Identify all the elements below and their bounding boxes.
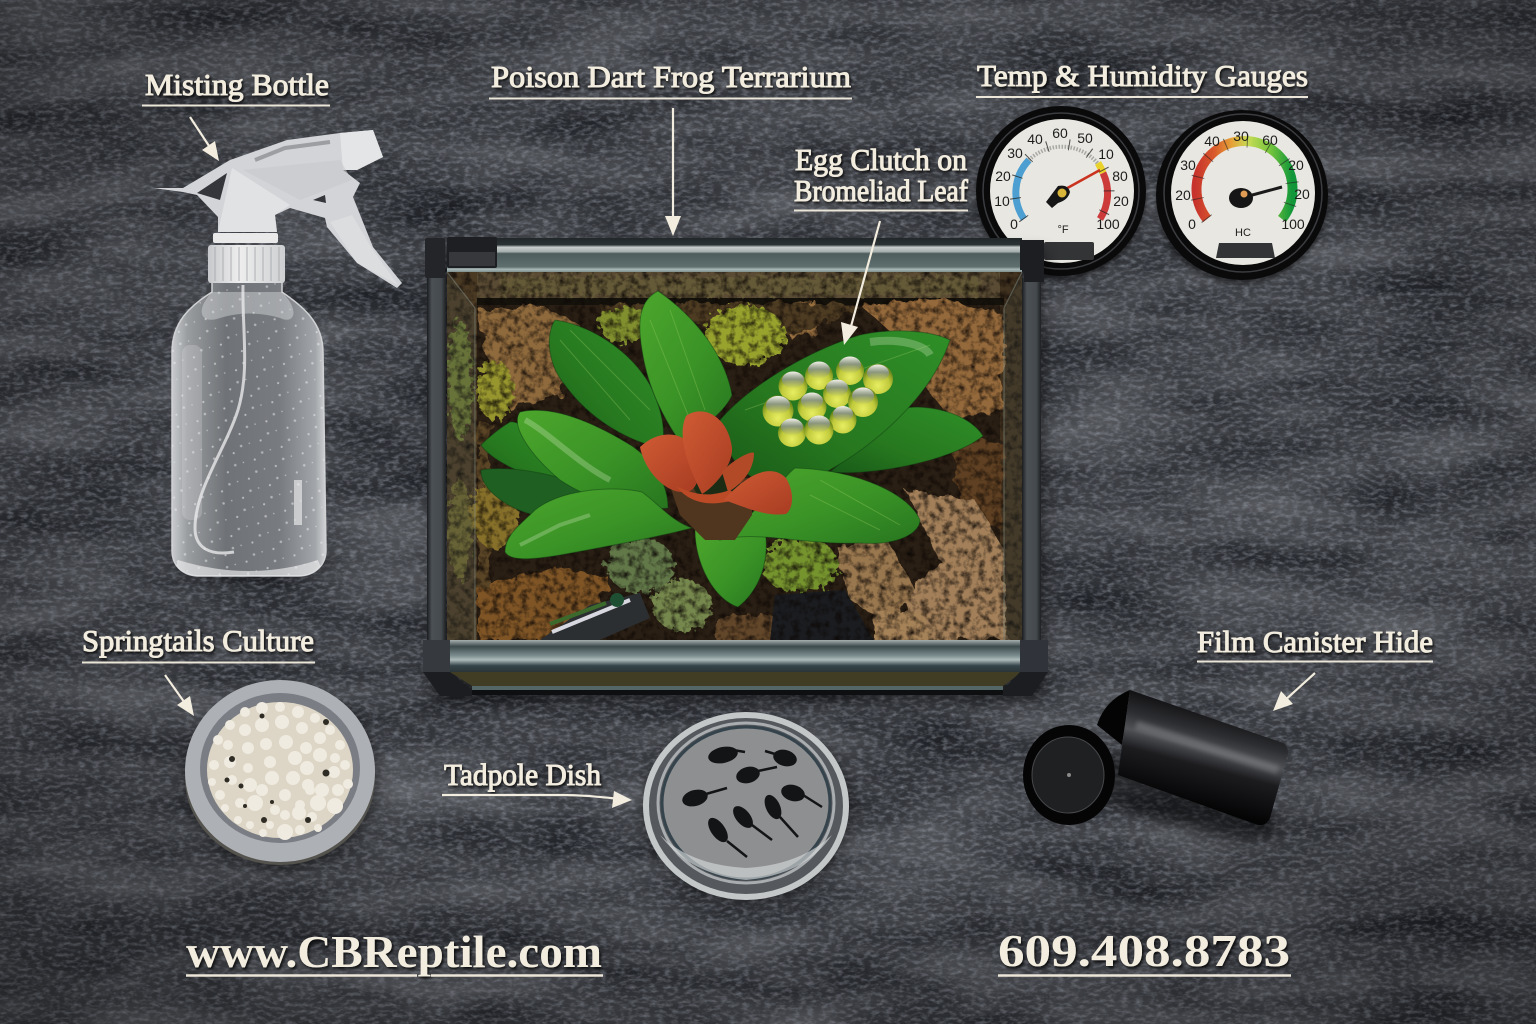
gauge: humidity: 20	[1288, 157, 1304, 173]
gauge: humidity	[1156, 110, 1328, 284]
arrow: to springtails culture	[165, 675, 194, 716]
gauge: temperature: 30	[1007, 145, 1023, 161]
tadpoles	[680, 744, 822, 857]
gauge: temperature: 20	[1113, 193, 1129, 209]
title label: Misting Bottle: Misting Bottle	[145, 67, 329, 102]
gauge: temperature: 20	[995, 168, 1011, 184]
arrow: to egg clutch	[841, 221, 880, 345]
label: Egg Clutch on Bromeliad Leaf: Bromeliad Leaf	[794, 173, 969, 208]
label: Tadpole Dish with arrow: Tadpole Dish	[444, 757, 601, 792]
terrarium glass walls and frame	[423, 237, 1048, 696]
title label: Poison Dart Frog Terrarium: Poison Dart Frog Terrarium	[491, 59, 851, 94]
gauge: temperature: °F	[1057, 224, 1069, 236]
gauge: temperature: 80	[1112, 168, 1128, 184]
gauge: temperature: 100	[1096, 216, 1120, 232]
tadpole dish	[644, 715, 852, 902]
gauge: temperature: 10	[994, 193, 1010, 209]
gauge: humidity: 30	[1180, 157, 1196, 173]
gauge: humidity: 40	[1204, 133, 1220, 149]
gauge: humidity: HC	[1235, 227, 1251, 239]
label: Film Canister Hide: Film Canister Hide	[1197, 624, 1433, 659]
bromeliad plant	[481, 291, 983, 607]
label: Egg Clutch on Bromeliad Leaf: Egg Clutch on	[795, 142, 967, 177]
label: Springtails Culture: Springtails Culture	[82, 623, 314, 658]
title label: Temp and Humidity Gauges: Temp & Humidity Gauges	[977, 58, 1308, 93]
gauge: temperature: 0	[1010, 216, 1018, 232]
arrow: to terrarium	[665, 108, 681, 236]
springtails culture dish	[185, 680, 378, 868]
arrow: to film canister	[1273, 673, 1315, 711]
gauge: temperature: 10	[1098, 146, 1114, 162]
film canister hide	[1023, 690, 1288, 857]
gauge: humidity: 20	[1294, 186, 1310, 202]
gauge: temperature	[976, 106, 1146, 280]
egg clutch	[762, 356, 893, 447]
arrow: to misting bottle	[190, 117, 219, 161]
gauge: humidity: 60	[1262, 132, 1278, 148]
gauge: humidity: 30	[1233, 128, 1249, 144]
terrarium	[423, 237, 1048, 700]
gauge: temperature: 50	[1077, 130, 1093, 146]
gauge: humidity: 100	[1281, 216, 1305, 232]
terrarium substrate	[447, 272, 1022, 642]
gauge: temperature: 40	[1027, 131, 1043, 147]
red bromeliad center petals	[640, 411, 792, 515]
gauge: humidity: 20	[1175, 187, 1191, 203]
phone number: 609.408.8783	[998, 925, 1290, 976]
springtail culture granules	[208, 702, 353, 840]
gauge: humidity: 0	[1188, 216, 1196, 232]
label: Egg Clutch on Bromeliad Leaf	[794, 142, 969, 210]
label: Tadpole Dish with arrow	[442, 757, 632, 808]
misting bottle	[153, 130, 402, 580]
sprayer head	[153, 130, 402, 288]
dark specks	[224, 714, 330, 823]
website address: www.CBReptile.com	[186, 926, 602, 977]
gauge: temperature: 60	[1052, 125, 1068, 141]
